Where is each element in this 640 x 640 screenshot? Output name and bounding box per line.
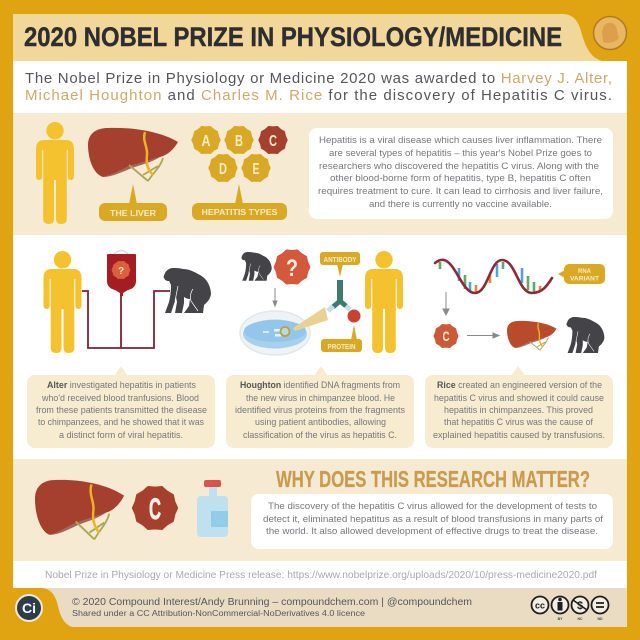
caption: rice: that hepatitis C virus was the cause of: [444, 417, 593, 427]
icon: creative commons badges: $: [577, 600, 583, 612]
label: hepatitis types: [192, 184, 287, 220]
icon: medicine bottle: [197, 480, 228, 537]
rice illustration: [434, 260, 605, 353]
licence text: Shared under a CC Attribution-NonCommercial-NoDerivatives 4.0 licence: [72, 609, 366, 618]
icon: chimpanzee: [164, 268, 211, 313]
hepatitis description box: Hepatitis is a viral disease which causes liver inflammation. There: [319, 135, 602, 145]
icon: nobel medal: [594, 16, 626, 50]
icon: liver: [35, 480, 124, 539]
caption: alter: from these patients transmitted the disease: [36, 405, 207, 415]
caption: alter: Alter investigated hepatitis in patients: [47, 380, 196, 390]
why text box: [251, 494, 613, 549]
arrow: rna to virus: [443, 292, 449, 315]
hepatitis type badges: B: [235, 133, 243, 150]
intro text: The Nobel Prize in Physiology or Medicine 2020 was awarded to Harvey J. Alter,: [25, 70, 612, 87]
caption: alter: who'd received blood tranfusions. Blood: [41, 393, 199, 403]
label: protein: [321, 325, 362, 352]
arrow: virus to liver: [467, 333, 499, 338]
source line: Nobel Prize in Physiology or Medicine Press release: https://www.nobelprize.org/uploads/2020/10/press-medicine2020.pdf: [45, 570, 597, 581]
title band: [13, 14, 602, 61]
icon: liver: [88, 128, 178, 181]
icon: virus c badge: C: [442, 328, 450, 344]
icon: virus c badge: C: [149, 493, 161, 526]
icon: creative commons badges: cc: [535, 600, 545, 610]
label: hepatitis types: HEPATITIS TYPES: [202, 208, 278, 217]
icon: chimpanzee: [241, 252, 272, 281]
caption: alter: [27, 366, 215, 448]
caption: houghton: [226, 366, 414, 448]
tube: [82, 291, 170, 348]
caption: houghton: classification of the virus as hepatitis C.: [243, 430, 397, 440]
hepatitis type badges: [192, 127, 287, 181]
caption: alter: to chimpanzees, and he showed that it was: [38, 417, 204, 427]
hepatitis description box: and there is currently no vaccine available.: [369, 199, 552, 209]
intro text: [25, 70, 612, 104]
caption: houghton: identified virus proteins from the fragments: [235, 405, 405, 415]
panel: introduction: [13, 61, 627, 113]
icon: person: [36, 122, 74, 224]
label: antibody: ANTIBODY: [324, 257, 357, 264]
caption: alter: a distinct form of viral hepatitis.: [59, 430, 183, 440]
panel: the research: [13, 235, 627, 459]
rna strand: [435, 260, 552, 293]
hepatitis type badges: E: [252, 161, 260, 178]
hepatitis type badges: D: [219, 161, 227, 178]
title: 2020 NOBEL PRIZE IN PHYSIOLOGY/MEDICINE: [24, 22, 562, 52]
source line: [13, 561, 627, 588]
intro text: Michael Houghton and Charles M. Rice for the discovery of Hepatitis C virus.: [25, 87, 612, 104]
icon: person: [365, 251, 403, 353]
icon: person: [44, 251, 82, 353]
caption: houghton: the new virus in chimpanzee blood. He: [246, 393, 395, 403]
caption: houghton: Houghton identified DNA fragments from: [240, 380, 400, 390]
hepatitis description box: requires treatment to cure. It can lead to cirrhosis and liver failure,: [318, 186, 603, 196]
icon: petri dish: [240, 307, 328, 355]
icon: question badge: ?: [286, 255, 298, 282]
caption: rice: hepatitis C virus and showed it could cause: [434, 393, 604, 403]
hepatitis description box: [309, 128, 613, 219]
footer: [13, 588, 627, 627]
why text box: The discovery of the hepatitis C virus allowed for the development of tests to: [268, 501, 597, 512]
label: the liver: THE LIVER: [110, 209, 156, 218]
caption: rice: [425, 366, 613, 448]
icon: blood bag: [107, 250, 136, 296]
why text box: detect it, eliminated hepatitus as a result of blood transfusions in many parts of: [263, 514, 603, 525]
icon: creative commons badges: [532, 596, 608, 621]
houghton illustration: [240, 250, 403, 355]
label: protein: PROTEIN: [328, 344, 356, 351]
icon: virus c badge: [434, 325, 458, 347]
hepatitis description box: researchers who discovered the hepatitis C virus. Along with the: [319, 161, 599, 171]
icon: protein: [348, 310, 360, 322]
icon: creative commons badges: NC: [577, 617, 583, 621]
icon: liver: [507, 321, 556, 350]
icon: antibody: [328, 280, 350, 311]
label: antibody: [320, 252, 360, 277]
caption: rice: hepatitis in chimpanzees. This proved: [444, 405, 593, 415]
hepatitis type badges: C: [269, 133, 277, 150]
hepatitis description box: other blood-borne form of hepatitis, type B, hepatitis C often: [330, 173, 591, 183]
panel: what is hepatitis: [13, 113, 627, 235]
icon: question badge: [274, 250, 310, 284]
icon: virus c badge: [133, 487, 177, 529]
label: rna variant: VARIANT: [570, 276, 599, 282]
caption: rice: explained hepatitis caused by transfusions.: [433, 430, 605, 440]
logo: compound interest: Ci: [22, 600, 36, 616]
label: rna variant: [558, 264, 605, 284]
hepatitis description box: are several types of hepatitis – this year's Nobel Prize goes to: [329, 148, 592, 158]
label: the liver: [99, 184, 167, 221]
logo: compound interest: [16, 595, 42, 621]
why text box: the world. It also allowed development of effective drugs to treat the disease.: [266, 526, 598, 537]
alter illustration: [44, 250, 211, 353]
caption: rice: Rice created an engineered version of the: [437, 380, 602, 390]
hepatitis type badges: A: [202, 133, 211, 150]
icon: chimpanzee: [566, 317, 604, 353]
label: rna variant: RNA: [578, 268, 591, 275]
copyright text: © 2020 Compound Interest/Andy Brunning – compoundchem.com | @compoundchem: [72, 597, 472, 608]
icon: creative commons badges: ND: [597, 617, 603, 621]
icon: blood bag: ?: [118, 266, 124, 277]
arrow: chimp to dish: [273, 288, 277, 306]
icon: creative commons badges: BY: [558, 617, 563, 621]
panel: why does this research matter: [13, 459, 627, 561]
caption: houghton: using patient antibodies, allowing: [255, 417, 386, 427]
